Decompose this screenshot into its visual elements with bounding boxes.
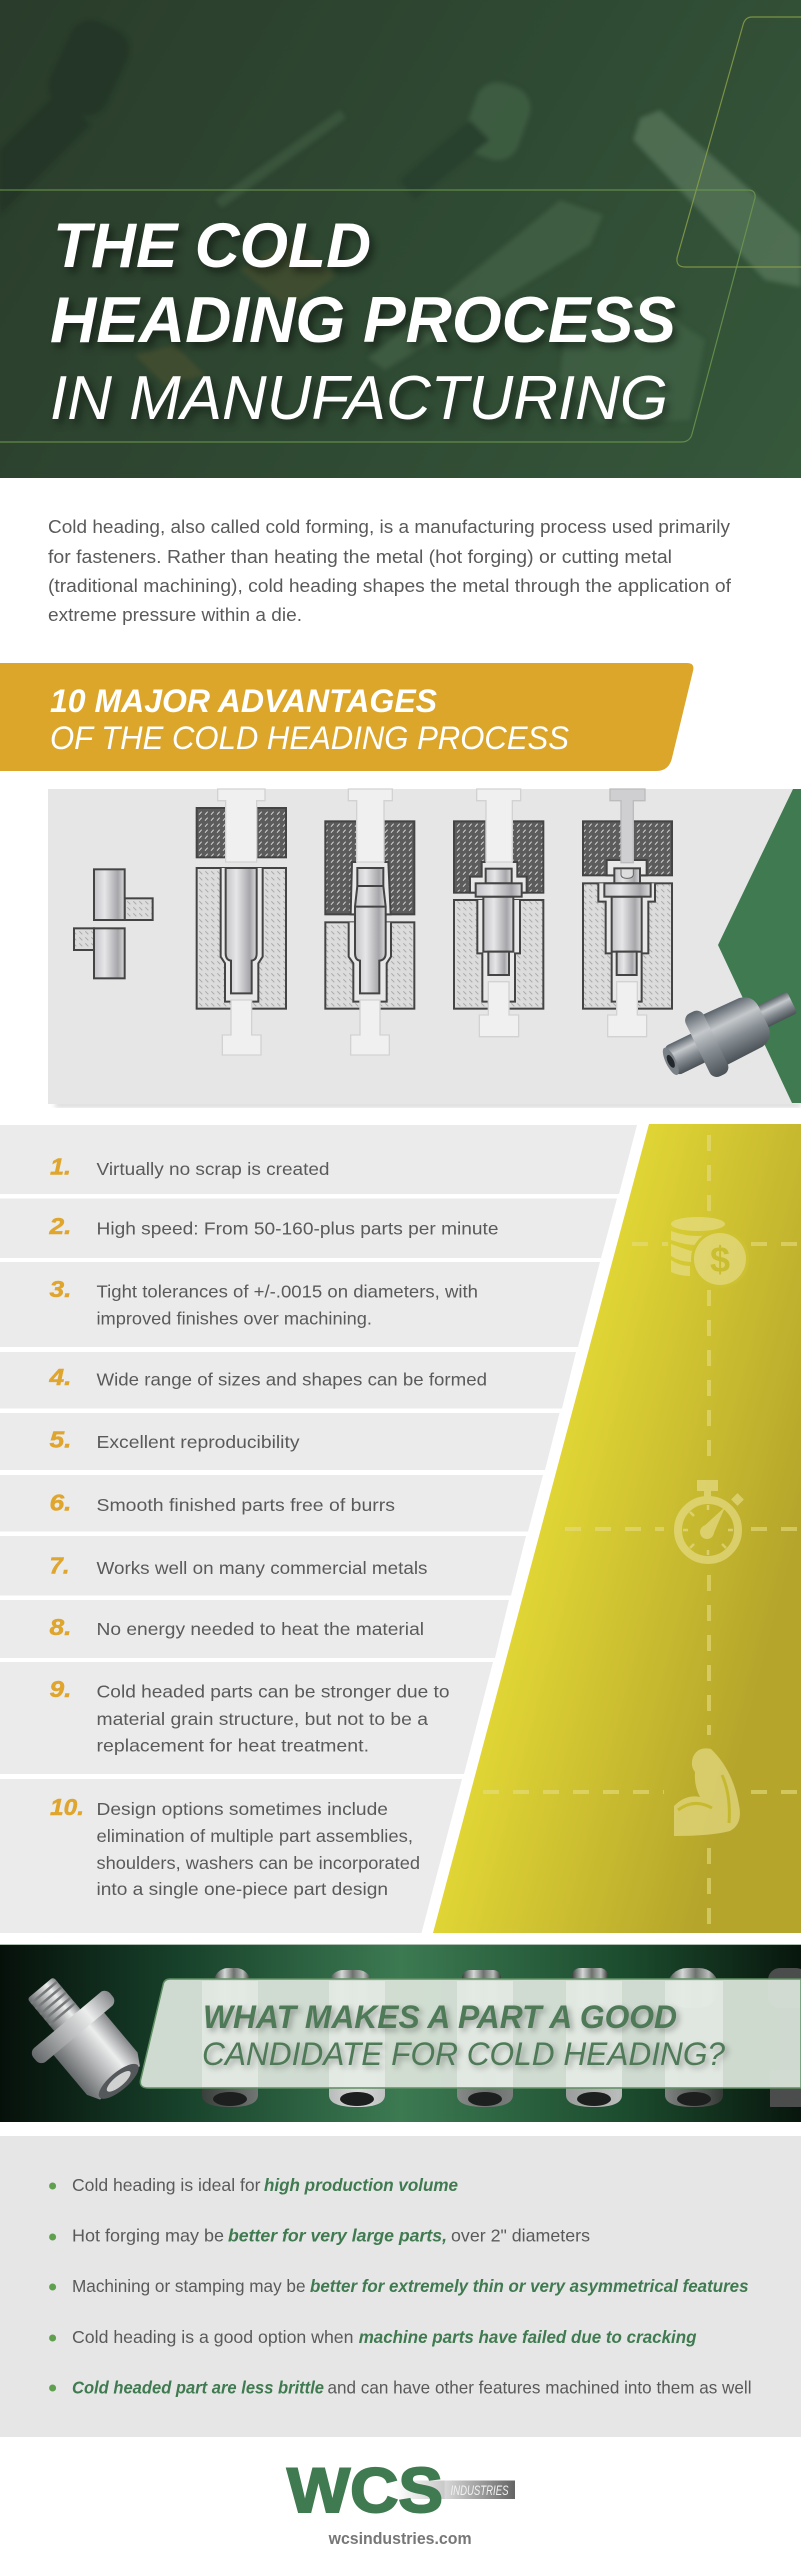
bullet 2: better for very large parts, <box>228 2226 447 2246</box>
advantages list <box>0 1124 801 1933</box>
icon: coins <box>671 1217 749 1288</box>
item 3: improved finishes over machining. <box>96 1308 372 1328</box>
intro paragraph: extreme pressure within a die. <box>48 605 302 625</box>
row of pins <box>202 1968 801 2107</box>
bullet 3: Machining or stamping may be <box>72 2276 306 2296</box>
item 6: 6. <box>50 1490 72 1516</box>
banner heading: OF THE COLD HEADING PROCESS <box>50 720 569 756</box>
item 4 <box>48 1364 487 1390</box>
logo: WCS <box>287 2456 443 2526</box>
banner heading: WHAT MAKES A PART A GOOD <box>203 1999 677 2035</box>
bullet 1: high production volume <box>264 2175 458 2195</box>
dashed guides <box>483 1135 801 1925</box>
threaded silver part <box>2 1956 163 2120</box>
item 9: 9. <box>50 1676 72 1702</box>
item 8: 8. <box>50 1614 72 1640</box>
bullet 3 <box>49 2276 749 2296</box>
item 9: Cold headed parts can be stronger due to <box>96 1682 450 1702</box>
item 8 <box>50 1614 424 1640</box>
item 10: shoulders, washers can be incorporated <box>96 1853 420 1873</box>
bullet 1: Cold heading is ideal for <box>72 2175 261 2195</box>
bullet 4: machine parts have failed due to cracking <box>359 2327 697 2347</box>
bullet 4: Cold heading is a good option when <box>72 2327 354 2347</box>
item 5: 5. <box>50 1426 72 1452</box>
intro paragraph: Cold heading, also called cold forming, is a manufacturing process used primarily <box>48 517 730 537</box>
item 4: 4. <box>48 1364 72 1390</box>
item 3 <box>50 1276 478 1328</box>
process diagram panel <box>48 789 801 1107</box>
bullet 1 <box>49 2175 458 2195</box>
pins seen through the glass <box>202 1981 723 2087</box>
item 2: High speed: From 50-160-plus parts per minute <box>96 1219 498 1239</box>
item 1: 1. <box>50 1154 71 1180</box>
bullet 2: Hot forging may be <box>72 2226 224 2246</box>
item 9 <box>50 1676 450 1756</box>
item 10 <box>50 1794 420 1899</box>
cold heading stages 3 to 4 <box>454 789 672 1037</box>
item 1 <box>50 1154 330 1180</box>
item 8: No energy needed to heat the material <box>96 1619 424 1639</box>
rows <box>0 1125 637 1933</box>
bullet 4 <box>49 2327 697 2347</box>
item 10: Design options sometimes include <box>96 1799 388 1819</box>
banner heading: CANDIDATE FOR COLD HEADING? <box>202 2036 725 2072</box>
bullet 3: better for extremely thin or very asymmetrical features <box>310 2276 749 2296</box>
bullet 5 <box>49 2378 752 2398</box>
translucent glass bar <box>140 1979 801 2088</box>
item 10: 10. <box>50 1794 84 1820</box>
bullet list panel <box>0 2136 801 2437</box>
item 4: Wide range of sizes and shapes can be formed <box>96 1370 487 1390</box>
outline frame behind title <box>0 190 755 442</box>
icon: flexed arm <box>674 1748 740 1836</box>
header panel <box>0 0 801 478</box>
banner heading <box>50 683 569 756</box>
second heading stage <box>325 789 414 1055</box>
advantages banner <box>0 663 693 771</box>
title: IN MANUFACTURING <box>50 364 668 433</box>
icon: coins: $ <box>710 1239 730 1280</box>
third heading stage <box>454 789 543 1037</box>
item 2 <box>48 1213 498 1239</box>
item 9: replacement for heat treatment. <box>96 1736 369 1756</box>
item 5: Excellent reproducibility <box>96 1432 300 1452</box>
ghost bolt photos <box>0 13 801 423</box>
final piercing stage <box>583 789 672 1037</box>
bullet 5: and can have other features machined into them as well <box>328 2378 752 2398</box>
item 6: Smooth finished parts free of burrs <box>96 1495 395 1515</box>
logo: INDUSTRIES <box>450 2482 509 2498</box>
outline frame upper right <box>677 17 801 267</box>
icon: stopwatch <box>678 1480 744 1560</box>
candidate banner <box>0 1944 801 2122</box>
intro paragraph: (traditional machining), cold heading shapes the metal through the application of <box>48 576 732 596</box>
item 9: material grain structure, but not to be a <box>96 1709 428 1729</box>
banner heading <box>202 1999 725 2072</box>
item 10: elimination of multiple part assemblies, <box>96 1826 413 1846</box>
item 5 <box>50 1426 300 1452</box>
item 10: into a single one-piece part design <box>96 1879 388 1899</box>
website url: wcsindustries.com <box>328 2529 472 2548</box>
title <box>50 211 676 433</box>
first heading stage <box>197 789 286 1055</box>
cut-off stage <box>74 869 153 978</box>
item 7: Works well on many commercial metals <box>96 1558 428 1578</box>
cold heading stages 0 to 2 <box>74 789 414 1055</box>
item 1: Virtually no scrap is created <box>96 1159 330 1179</box>
item 3: 3. <box>50 1276 72 1302</box>
intro paragraph: for fasteners. Rather than heating the metal (hot forging) or cutting metal <box>48 547 672 567</box>
item 2: 2. <box>48 1213 72 1239</box>
banner heading: 10 MAJOR ADVANTAGES <box>50 683 438 719</box>
green chevron <box>718 789 801 1103</box>
item 3: Tight tolerances of +/-.0015 on diameters, with <box>96 1282 478 1302</box>
logo <box>287 2456 515 2526</box>
title: THE COLD <box>53 211 371 281</box>
item 7: 7. <box>50 1552 70 1578</box>
intro paragraph <box>48 517 732 625</box>
title: HEADING PROCESS <box>50 283 676 356</box>
finished steel part <box>651 971 801 1095</box>
bullet 5: Cold headed part are less brittle <box>72 2378 324 2398</box>
bullet 2 <box>49 2226 590 2246</box>
item 7 <box>50 1552 428 1578</box>
yellow panel <box>433 1124 801 1933</box>
bullet 2: over 2" diameters <box>451 2226 590 2246</box>
item 6 <box>50 1490 395 1516</box>
